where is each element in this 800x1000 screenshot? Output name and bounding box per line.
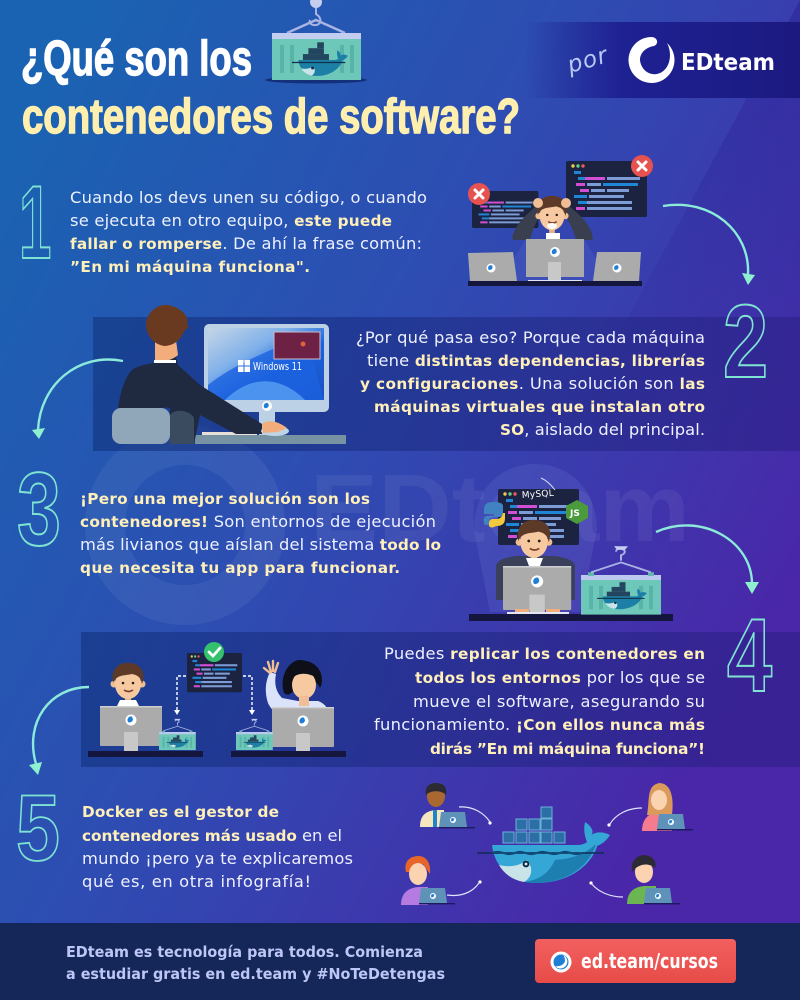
number 1: 1 <box>19 164 51 280</box>
text block 2: SO, aislado del principal. <box>500 420 705 439</box>
icon: docker container with hook <box>265 0 367 84</box>
number 5: 5 <box>16 777 60 881</box>
icon: docker whale <box>477 807 610 883</box>
text block 4: todos los entornos por los que se <box>415 668 705 687</box>
arrow 1 to 2 <box>663 205 755 285</box>
text block 3: ¡Pero una mejor solución son los <box>80 490 370 508</box>
text block 5: mundo ¡pero ya te explicaremos <box>82 849 353 868</box>
scene 4: developers sharing containers <box>88 642 346 757</box>
text block 3: más livianos que aíslan del sistema todo lo <box>80 535 441 554</box>
title <box>21 32 520 144</box>
header brand band <box>525 22 800 98</box>
text block 1: se ejecuta en otro equipo, este puede <box>70 211 392 230</box>
por: por <box>564 42 612 79</box>
text block 2: tiene distintas dependencias, librerías <box>367 351 705 370</box>
scene 3: developer with container and dependencies: MySQL <box>522 489 554 501</box>
panel: step 2 <box>93 283 800 451</box>
scene 3: developer with container and dependencies <box>469 464 673 621</box>
title: contenedores de software? <box>22 90 520 144</box>
watermark logo: EDteam <box>310 455 690 562</box>
EDteam logo <box>629 37 775 83</box>
text block 3 <box>80 490 441 577</box>
person: top right <box>642 783 693 831</box>
person: bottom right <box>627 855 680 904</box>
footer <box>0 923 800 1000</box>
text block 3: contenedores! Son entornos de ejecución <box>80 512 436 531</box>
EDteam logo: EDteam <box>681 50 775 76</box>
panel: step 4 <box>81 597 800 767</box>
text block 4: dirás ”En mi máquina funciona”! <box>430 740 705 758</box>
text block 4: mueve el software, asegurando su <box>413 692 705 711</box>
text block 4: funcionamiento. ¡Con ellos nunca más <box>374 715 705 734</box>
text block 1 <box>70 188 427 276</box>
text block 4: Puedes replicar los contenedores en <box>384 644 705 663</box>
arrow 4 to 5 <box>29 687 89 775</box>
title: ¿Qué son los <box>21 32 252 86</box>
arrow 2 to 3 <box>32 360 123 439</box>
scene 3: developer with container and dependencies: JS <box>569 509 580 519</box>
text block 2: ¿Por qué pasa eso? Porque cada máquina <box>356 328 705 347</box>
text block 1: ”En mi máquina funciona". <box>70 258 310 276</box>
scene 2: man at Windows 11 computer: Windows 11 <box>253 361 302 373</box>
text block 5: qué es, en otra infografía! <box>82 872 311 891</box>
watermark logo <box>85 425 690 625</box>
footer text: a estudiar gratis en ed.team y #NoTeDetengas <box>66 965 445 983</box>
scene 1: frustrated developer <box>468 155 653 286</box>
flow arrows to whale <box>447 807 642 897</box>
arrow 3 to 4 <box>656 525 759 594</box>
text block 2: y configuraciones. Una solución son las <box>360 374 705 393</box>
number 4: 4 <box>727 597 772 713</box>
text block 5 <box>82 803 353 891</box>
button: ed.team/cursos <box>581 949 718 973</box>
text block 4 <box>374 644 705 758</box>
person: top left <box>420 783 475 828</box>
text block 1: fallar o romperse. De ahí la frase común: <box>70 234 422 253</box>
text block 2: máquinas virtuales que instalan otro <box>374 398 705 416</box>
footer text: EDteam es tecnología para todos. Comienza <box>66 943 423 961</box>
number 2: 2 <box>723 283 768 399</box>
button <box>535 939 736 983</box>
person: bottom left <box>401 856 455 905</box>
text block 2 <box>356 328 705 439</box>
number 3: 3 <box>17 450 61 568</box>
text block 1: Cuando los devs unen su código, o cuando <box>70 188 427 207</box>
text block 3: que necesita tu app para funcionar. <box>80 559 400 577</box>
text block 5: Docker es el gestor de <box>82 803 279 821</box>
text block 5: contenedores más usado en el <box>82 826 342 845</box>
scene 2: man at Windows 11 computer <box>112 305 346 444</box>
footer text <box>66 943 445 983</box>
